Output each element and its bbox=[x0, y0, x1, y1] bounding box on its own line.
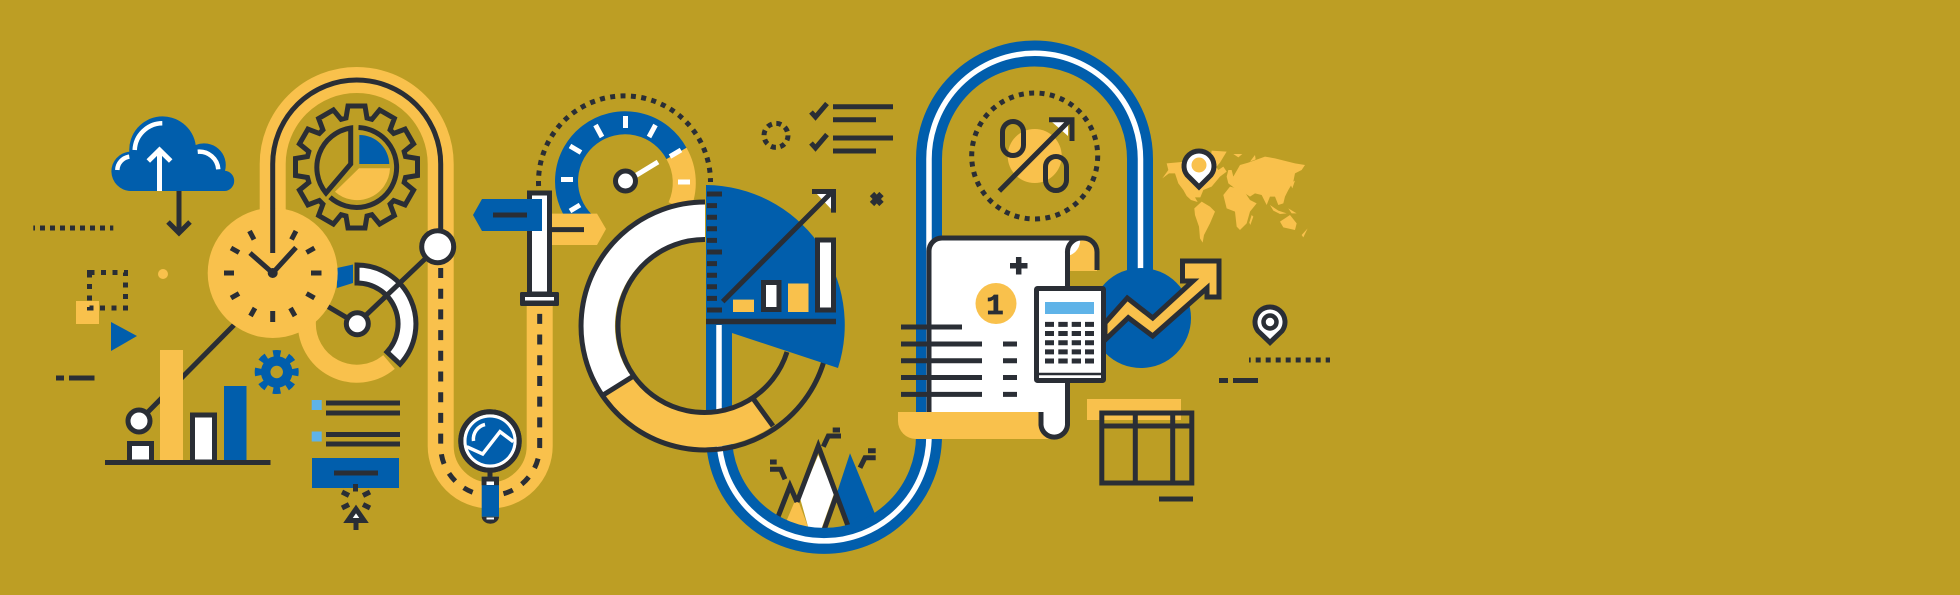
dotted line right bbox=[1249, 358, 1330, 362]
icon: dashed square with yellow square bbox=[76, 272, 126, 324]
bar chart with trend line bbox=[105, 325, 270, 462]
table icon bbox=[1087, 399, 1192, 483]
number badge: 1 bbox=[986, 290, 1004, 323]
map pin one bbox=[1184, 151, 1214, 187]
donut chart bbox=[581, 202, 824, 450]
blue circle behind trend arrow bbox=[1091, 268, 1191, 368]
blue play triangle bbox=[111, 322, 137, 351]
world map bbox=[1162, 151, 1308, 243]
map pin two bbox=[1255, 307, 1285, 342]
checklist bbox=[811, 104, 893, 151]
decorative dotted line left bbox=[33, 226, 113, 230]
icon: cloud upload bbox=[111, 116, 234, 233]
yellow winding track with clock line and dashes bbox=[273, 80, 540, 496]
blue pie wedge with bar chart and growth arrow bbox=[706, 185, 845, 368]
cross mark bbox=[872, 194, 882, 204]
track node circle bbox=[422, 231, 454, 263]
icon: magnifier bbox=[461, 412, 519, 524]
dotted mini circle bbox=[764, 123, 788, 147]
dash marks right bbox=[1219, 378, 1258, 383]
speedometer gauge bbox=[561, 116, 690, 223]
icon: small blue cog bbox=[258, 354, 295, 390]
list panel with lines bbox=[312, 400, 400, 444]
blue looping track bbox=[719, 53, 1140, 541]
signpost bbox=[473, 193, 606, 306]
document scroll bbox=[898, 238, 1097, 439]
dash marks left bbox=[56, 376, 94, 380]
icon: gear with pie chart bbox=[296, 106, 418, 228]
percent growth icon bbox=[972, 93, 1098, 219]
zigzag growth arrow bbox=[1105, 261, 1219, 340]
icon: clock bbox=[208, 208, 338, 338]
yellow dot bbox=[158, 269, 168, 279]
radial gauge chart bbox=[307, 259, 425, 374]
dash under table bbox=[1159, 496, 1193, 502]
mountains bbox=[770, 430, 876, 533]
button with cursor icon bbox=[312, 458, 399, 530]
calculator bbox=[1036, 288, 1104, 380]
dotted arc above gauge bbox=[539, 96, 711, 186]
